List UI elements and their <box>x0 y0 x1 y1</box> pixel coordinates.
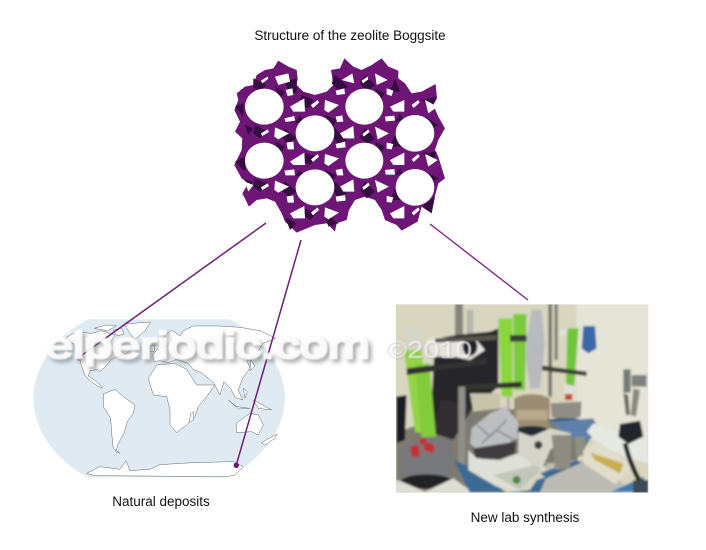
channel openings <box>245 73 438 219</box>
connector: to North American deposit <box>78 223 266 358</box>
blue mats <box>453 460 547 493</box>
green columns <box>403 348 424 434</box>
white tubing <box>426 337 485 360</box>
connector: to lab synthesis <box>430 224 528 300</box>
plates <box>396 478 473 493</box>
Antarctica <box>87 461 243 477</box>
Australia <box>236 413 263 435</box>
watermark: ©2010 <box>386 337 472 364</box>
left beaker <box>402 438 451 478</box>
North America <box>67 331 132 387</box>
lab photo <box>396 304 648 493</box>
Africa <box>148 363 215 433</box>
balance <box>583 442 633 484</box>
wall patch <box>470 393 500 412</box>
dark shading <box>235 75 438 230</box>
blue controller <box>582 326 597 353</box>
white cloth <box>587 423 648 463</box>
right beaker <box>551 402 582 422</box>
Arctic islands <box>94 325 124 336</box>
glass <box>406 328 412 350</box>
site markers <box>76 355 239 468</box>
gauges <box>623 369 631 393</box>
South America <box>103 389 135 453</box>
small windows <box>261 73 388 85</box>
Eurasia <box>153 326 276 400</box>
floor <box>540 460 624 492</box>
label: natural deposits: Natural deposits <box>112 494 210 509</box>
bench shadow <box>396 403 590 493</box>
clamps dark mass <box>432 328 498 433</box>
label: lab synthesis: New lab synthesis <box>471 510 580 525</box>
center-front hotplate <box>468 450 540 492</box>
Britain, Japan <box>150 345 255 371</box>
title: Structure of the zeolite Boggsite <box>254 28 446 43</box>
watermark: elperiodic.com <box>45 325 370 366</box>
foil dome <box>470 407 518 450</box>
watermark: ©2010 <box>387 338 473 365</box>
foil condenser <box>526 309 545 388</box>
clamp arms <box>407 358 488 375</box>
pump <box>618 421 643 444</box>
steel cup <box>552 435 572 470</box>
watermark: elperiodic.com <box>48 328 373 369</box>
watermark <box>45 325 473 369</box>
poles <box>455 303 463 347</box>
stand rods <box>458 387 465 470</box>
connector: to Antarctic deposit <box>236 240 301 466</box>
ocean <box>33 319 285 477</box>
zeolite structure <box>234 58 445 233</box>
world map <box>33 319 285 477</box>
center brown beaker <box>514 394 550 435</box>
bottom right blue <box>633 480 648 493</box>
Greenland <box>124 322 151 339</box>
continents <box>67 322 277 477</box>
back hotplate <box>518 428 572 470</box>
Indonesia islands <box>228 388 272 410</box>
